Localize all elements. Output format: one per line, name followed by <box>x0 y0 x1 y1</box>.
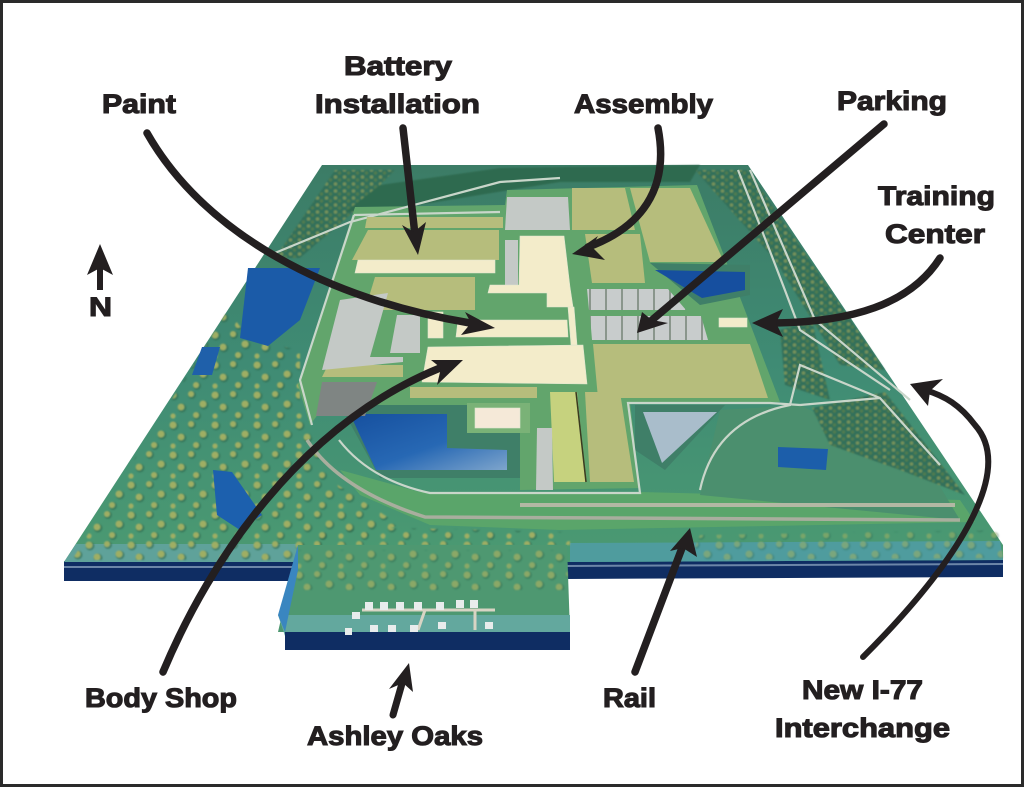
tree line <box>576 392 586 482</box>
label: Rail: Rail <box>603 683 656 713</box>
label: Battery Installation: Installation <box>315 89 480 119</box>
roads <box>270 170 960 520</box>
ponds <box>192 263 828 530</box>
arrow: Assembly <box>572 128 661 260</box>
gray yards <box>316 197 570 490</box>
helipad surround <box>467 403 530 433</box>
label: Battery Installation: Battery <box>344 51 452 81</box>
arrow: Training Center <box>752 258 940 337</box>
label: Paint: Paint <box>102 89 176 119</box>
arrow: New I-77 Interchange <box>863 379 988 657</box>
label: Parking: Parking <box>837 86 947 116</box>
arrow: Paint <box>147 133 495 335</box>
right lower terrain <box>700 405 960 520</box>
parking lots <box>587 289 708 340</box>
label: New I-77 Interchange: New I-77 <box>802 675 923 705</box>
tree areas <box>72 165 1003 560</box>
bright field strip <box>550 392 586 482</box>
label: Assembly: Assembly <box>574 89 713 119</box>
buildings <box>355 236 747 428</box>
arrow: Body Shop <box>163 360 463 672</box>
arrow: Battery Installation <box>402 128 426 255</box>
label: New I-77 Interchange: Interchange <box>775 713 950 743</box>
label: Ashley Oaks: Ashley Oaks <box>307 721 483 751</box>
tan fields <box>322 188 768 482</box>
terrain <box>64 165 1003 562</box>
glass front reflection <box>64 541 1003 562</box>
front edge of model <box>64 558 1003 581</box>
arrow: Ashley Oaks <box>389 663 413 715</box>
arrow: Parking <box>637 124 884 333</box>
south green band <box>340 470 975 530</box>
label: Training Center: Training <box>878 181 995 211</box>
north arrow <box>87 244 113 290</box>
label: N: N <box>89 292 112 322</box>
panel: site model <box>64 165 1003 650</box>
arrow: Rail <box>635 528 697 672</box>
label: Training Center: Center <box>885 219 986 249</box>
extension: Ashley Oaks <box>278 545 570 650</box>
label: Body Shop: Body Shop <box>85 683 237 713</box>
site pad <box>298 185 780 490</box>
